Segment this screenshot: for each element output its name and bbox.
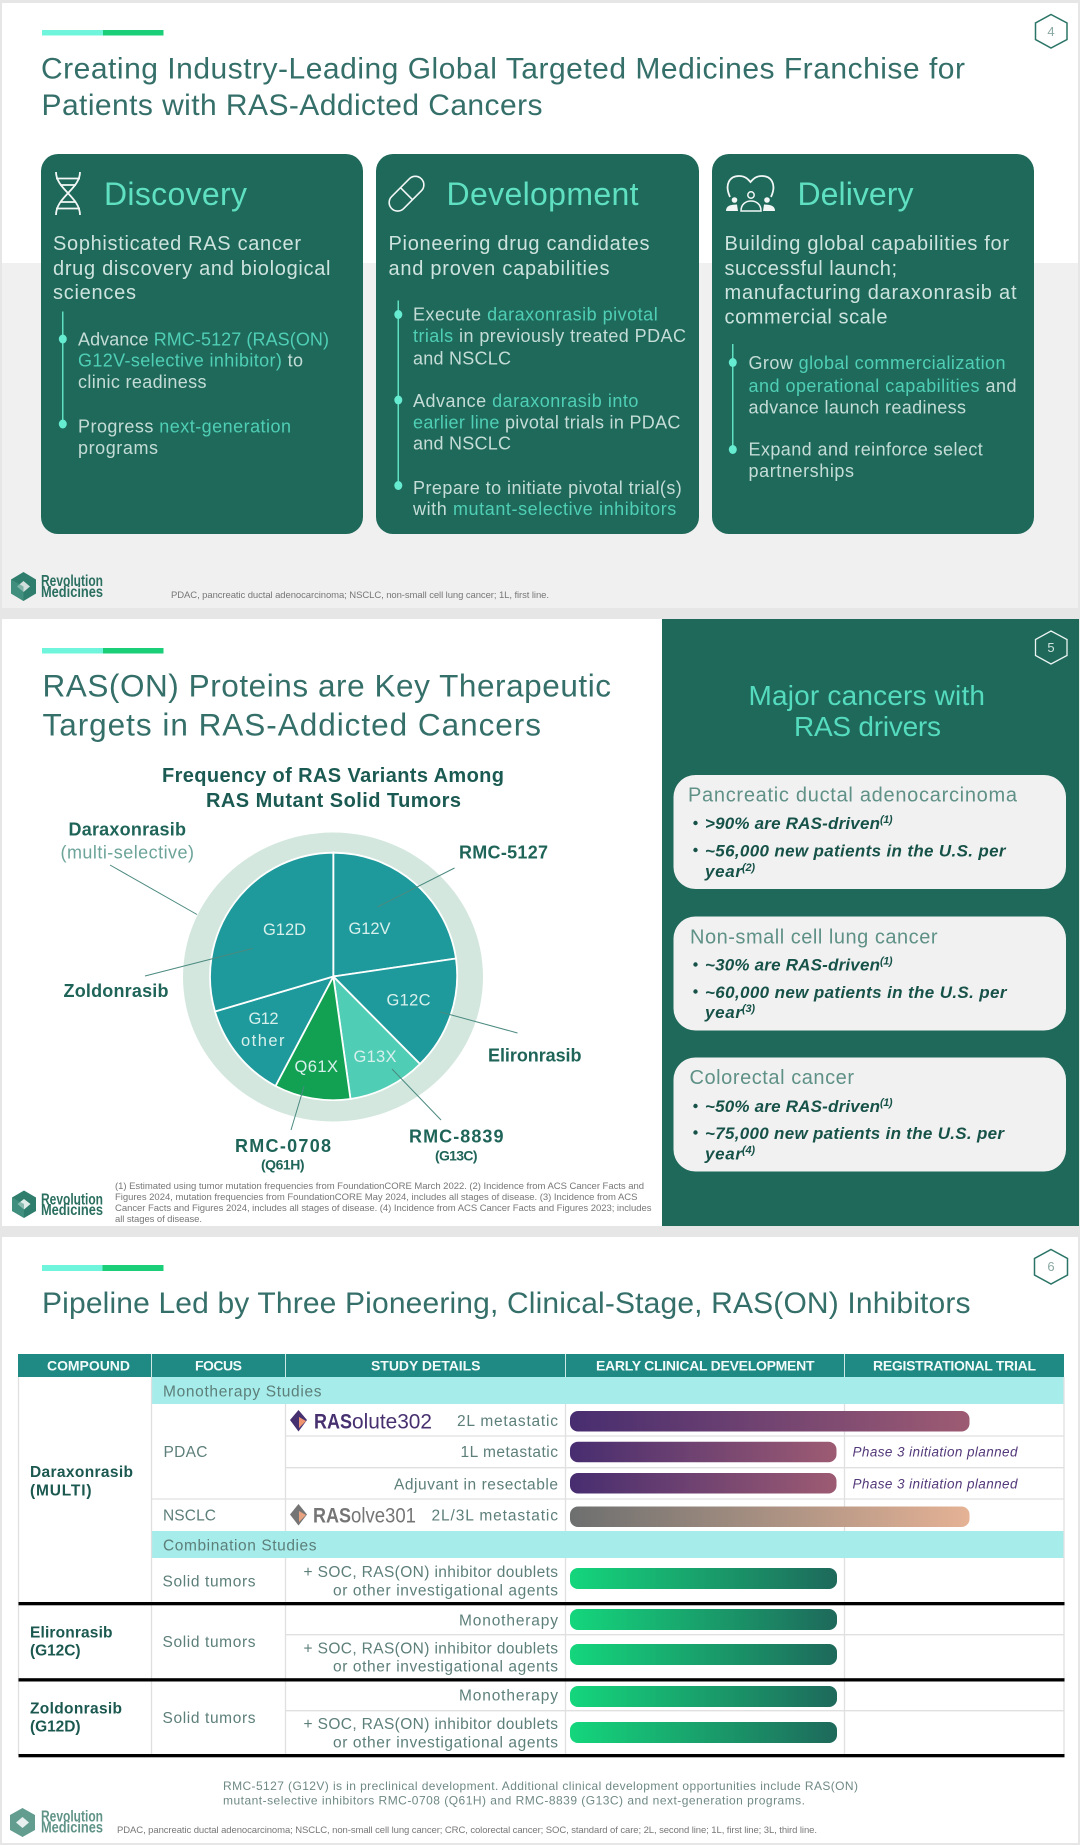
label: Daraxonrasib: (multi-selective) [60,842,194,862]
logo: RASolute302: RAS [314,1410,352,1434]
note: additional development: RMC-5127 (G12V) is in preclinical development. Additional clinical development opportunities include RAS(ON) [223,1779,858,1793]
study details column: or other investigational agents [333,1734,558,1752]
text: development bullets [412,304,686,519]
panel: discovery [41,154,363,534]
accent bar [42,648,164,654]
card: colorectal: (4) [742,1144,755,1156]
study details column: 2L/3L metastatic [432,1508,558,1524]
text: discovery intro: Sophisticated RAS cancer [53,233,301,255]
focus column: Solid tumors [162,1574,256,1590]
card: pancreatic: >90% are RAS-driven [705,814,880,833]
text: development bullets: Advance daraxonrasib into [413,391,638,411]
card: non-small cell lung: (3) [742,1003,755,1015]
text: discovery bullets: G12V-selective inhibitor) to [78,350,303,370]
title: RAS(ON) Proteins are Key Therapeutic [42,668,611,704]
label: Daraxonrasib: Daraxonrasib [68,820,186,840]
text: development bullets: trials in previously treated PDAC [413,326,686,346]
footnotes: all stages of disease. [115,1214,202,1225]
heading: major cancers: Major cancers with [748,680,985,711]
timeline: delivery [729,344,737,454]
logo: Revolution Medicines: Revolution [41,1808,103,1826]
card: pancreatic: (2) [742,862,755,874]
slice: G13X [333,976,420,1099]
label: Daraxonrasib [60,820,194,862]
text: delivery bullets: Expand and reinforce select [748,440,983,460]
logo: Revolution Medicines: Medicines [41,584,103,601]
note: additional development [223,1779,858,1808]
text: discovery bullets: Progress next-generation [78,416,291,436]
logo: RASolve301: olve301 [351,1504,416,1528]
text: discovery intro: drug discovery and biological [53,258,330,280]
label: Zoldonrasib: Zoldonrasib [64,981,168,1001]
section dividers [18,1602,1064,1757]
footnote: PDAC, pancreatic ductal adenocarcinoma; NSCLC, non-small cell lung cancer; CRC, colorectal cancer; SOC, standard of care; 2L, second line; 1L, first line; 3L, third line. [117,1825,817,1836]
progress bars: combinations and selective inhibitors [570,1568,837,1743]
logo: RASolve301 [290,1504,416,1528]
label: RMC-0708: RMC-0708 [235,1136,331,1156]
text: delivery bullets: and operational capabilities and [748,376,1016,396]
study details column: + SOC, RAS(ON) inhibitor doublets [304,1564,558,1581]
pie labels: G12 [248,1010,278,1028]
slice: G12C [333,958,457,1064]
title: Patients with RAS-Addicted Cancers [42,89,542,122]
page number 4 [1036,14,1067,48]
compound names: (G12D) [30,1718,80,1736]
study details column: Monotherapy [459,1612,558,1630]
page number 5 [1036,631,1067,664]
icon: pill [386,173,427,215]
card: colorectal: year [704,1144,743,1164]
pie labels: G12D [263,921,306,939]
band: combination studies: Combination Studies [163,1538,317,1554]
logo: Revolution Medicines [12,1190,103,1219]
text: delivery intro: successful launch; [724,258,897,280]
table header: COMPOUND [47,1358,130,1374]
heading: Development: Development [446,176,639,212]
text: delivery bullets: partnerships [748,461,854,481]
text: discovery bullets: Advance RMC-5127 (RAS(ON) [78,330,329,350]
table header: FOCUS [195,1358,242,1374]
slice: G12 other [215,976,333,1086]
pie labels: G12V [348,920,390,938]
study details column: Monotherapy [459,1688,558,1704]
pie labels: G12C [386,992,431,1010]
logo: Revolution Medicines [10,1808,103,1837]
card: pancreatic: (1) [880,814,893,826]
footnotes [115,1181,652,1225]
phase 3 notes: Phase 3 initiation planned [852,1476,1018,1492]
logo: RASolve301: RAS [313,1504,351,1528]
footnotes: (1) Estimated using tumor mutation frequencies from FoundationCORE March 2022. (2) Incidence from ACS Cancer Facts and [115,1181,644,1192]
study details column: Adjuvant in resectable [394,1476,558,1494]
study details column: or other investigational agents [333,1658,558,1676]
text: development bullets: Execute daraxonrasib pivotal [413,304,658,324]
study details column [304,1413,558,1752]
card: pancreatic [674,775,1066,889]
pie chart [183,832,483,1122]
slide 6: pipeline [2,1237,1078,1843]
compound names: Zoldonrasib [30,1700,122,1718]
text: discovery bullets [78,330,329,458]
chart title [162,765,504,812]
card: non-small cell lung: Non-small cell lung cancer [690,926,938,948]
label: RMC-0708: (Q61H) [261,1156,304,1172]
label: Elironrasib: Elironrasib [488,1046,582,1066]
slice: G12V [333,853,456,976]
text: delivery bullets: Grow global commercialization [748,353,1006,373]
text: development bullets: and NSCLC [413,348,511,368]
note: additional development: mutant-selective inhibitors RMC-0708 (Q61H) and RMC-8839 (G13C) and next-generation programs. [223,1794,805,1808]
table header: REGISTRATIONAL TRIAL [873,1358,1036,1374]
icon: DNA helix [56,172,80,215]
card: non-small cell lung: (1) [880,956,893,968]
icon: people under heart [726,176,775,211]
band: monotherapy studies: Monotherapy Studies [163,1384,322,1400]
text: development bullets: Prepare to initiate pivotal trial(s) [413,478,682,498]
text: delivery bullets [748,353,1016,481]
grid lines [18,1377,1064,1755]
focus column: Solid tumors [162,1634,256,1651]
leader lines [110,865,518,1130]
text: development intro [388,233,650,280]
focus column: PDAC [164,1444,208,1461]
page number 4: 4 [1047,24,1055,39]
heading: major cancers [748,680,985,742]
card: colorectal: (1) [880,1097,893,1109]
page number 6: 6 [1047,1259,1055,1274]
text: development bullets: with mutant-selective inhibitors [412,499,676,519]
card: colorectal [674,1058,1066,1172]
card: pancreatic: ~56,000 new patients in the U.S. per [705,842,1007,860]
text: development bullets: and NSCLC [413,434,511,454]
heading: major cancers: RAS drivers [794,711,941,742]
label: RMC-0708 [235,1136,331,1172]
chart title: Frequency of RAS Variants Among [162,765,504,787]
table header [18,1354,1064,1377]
study details column: or other investigational agents [333,1582,558,1600]
timeline: discovery [59,312,67,428]
pie labels: other [241,1032,285,1050]
card: non-small cell lung [674,916,1066,1030]
phase 3 notes: Phase 3 initiation planned [852,1444,1018,1460]
logo: Revolution Medicines: Revolution [41,573,103,590]
compound names [30,1464,133,1736]
title: Creating Industry-Leading Global Targeted Medicines Franchise for [41,52,965,86]
label: RMC-8839: RMC-8839 [409,1126,504,1146]
focus column [162,1444,256,1727]
study details column: + SOC, RAS(ON) inhibitor doublets [304,1640,558,1658]
compound names: (G12C) [30,1642,80,1660]
text: discovery intro [53,233,330,304]
progress bars: daraxonrasib monotherapy [570,1411,970,1527]
text: development bullets: earlier line pivotal trials in PDAC [413,412,680,432]
logo: Revolution Medicines: Medicines [41,1202,103,1219]
logo: RASolute302: olute302 [352,1410,432,1434]
panel: major cancers background [662,619,1079,1226]
phase 3 notes [852,1444,1018,1492]
slide 4: franchise overview [2,3,1078,608]
band: combination studies [152,1531,1064,1558]
text: discovery bullets: clinic readiness [78,372,206,392]
page number 6 [1034,1250,1068,1284]
heading: Discovery: Discovery [104,176,247,212]
timeline: development [394,300,402,490]
text: delivery intro: manufacturing daraxonrasib at [724,282,1017,304]
card: non-small cell lung: ~30% are RAS-driven [705,956,880,974]
label: RMC-8839 [409,1126,504,1164]
table header: EARLY CLINICAL DEVELOPMENT [596,1358,815,1374]
text: delivery intro: Building global capabilities for [724,233,1009,255]
focus column: NSCLC [163,1508,216,1524]
card: pancreatic: year [704,862,743,881]
text: discovery intro: sciences [53,282,136,304]
focus column: Solid tumors [162,1710,256,1727]
pie labels: Q61X [294,1058,338,1076]
text: delivery bullets: advance launch readiness [748,398,966,418]
card: pancreatic: Pancreatic ductal adenocarcinoma [688,784,1018,806]
text: development intro: and proven capabilities [388,258,610,280]
title [42,668,611,742]
label: RMC-5127: RMC-5127 [459,842,548,862]
logo: Revolution Medicines: Medicines [41,1820,103,1836]
text: delivery intro: commercial scale [724,306,888,328]
text: development intro: Pioneering drug candidates [388,233,650,255]
chart title: RAS Mutant Solid Tumors [206,790,461,812]
accent bar [42,1265,164,1271]
logo: RASolute302 [290,1410,432,1434]
panel: delivery [712,154,1034,534]
pie labels [241,920,431,1076]
study details column: 2L metastatic [457,1413,558,1430]
heading: Delivery: Delivery [798,176,914,212]
pie labels: G13X [354,1048,396,1066]
card: non-small cell lung: ~60,000 new patients in the U.S. per [705,983,1008,1002]
table header: STUDY DETAILS [371,1358,480,1374]
title: Pipeline Led by Three Pioneering, Clinical-Stage, RAS(ON) Inhibitors [42,1287,970,1320]
table: pipeline [18,1354,1064,1757]
footnote: PDAC, pancreatic ductal adenocarcinoma; NSCLC, non-small cell lung cancer; 1L, first line. [171,590,549,601]
card: colorectal: Colorectal cancer [690,1067,854,1089]
slice: Q61X [276,976,350,1100]
footnotes: Figures 2024, mutation frequencies from FoundationCORE May 2024, includes all stages of disease. (3) Incidence from ACS [115,1192,638,1203]
logo: Revolution Medicines [11,572,103,601]
slide 5: RAS variants [2,619,1079,1226]
study details column: + SOC, RAS(ON) inhibitor doublets [304,1716,558,1733]
panel: development [376,154,699,534]
logo: Revolution Medicines: Revolution [41,1192,103,1208]
compound names: (MULTI) [30,1482,92,1500]
card: non-small cell lung: year [704,1003,743,1022]
band: monotherapy studies [152,1377,1064,1404]
page number 5: 5 [1047,640,1055,655]
footnotes: Cancer Facts and Figures 2024, includes all stages of disease. (4) Incidence from ACS Cancer Facts and Figures 2023; includes [115,1203,652,1214]
title: Targets in RAS-Addicted Cancers [42,706,541,742]
study details column: 1L metastatic [460,1444,558,1461]
compound names: Daraxonrasib [30,1464,133,1481]
slice: G12D [210,853,333,1012]
text: discovery bullets: programs [78,438,158,458]
card: colorectal: ~75,000 new patients in the U.S. per [705,1124,1005,1143]
accent bar [42,30,164,36]
card: colorectal: ~50% are RAS-driven [705,1097,880,1116]
compound names: Elironrasib [30,1624,112,1642]
title [41,52,965,122]
label: RMC-8839: (G13C) [435,1148,478,1164]
text: delivery intro [724,233,1017,328]
